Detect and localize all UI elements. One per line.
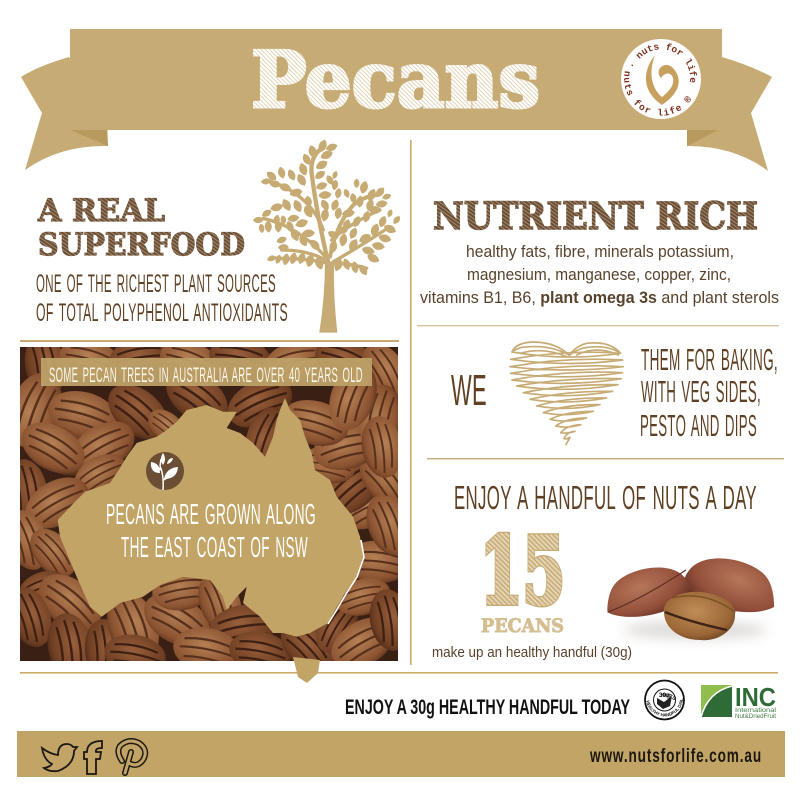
panel: handful <box>432 479 785 661</box>
panel: superfood <box>36 138 402 333</box>
number: 15: 15 <box>480 517 565 625</box>
panel: superfood: OF TOTAL POLYPHENOL ANTIOXIDANTS <box>36 299 288 327</box>
icon: twitter <box>42 744 77 771</box>
icon: healthy handful seal: NUTS <box>661 693 676 700</box>
panel: superfood: ONE OF THE RICHEST PLANT SOURCES <box>36 270 276 298</box>
panel: pecan photo map: PECANS ARE GROWN ALONG <box>106 499 316 531</box>
icon: healthy handful seal: HEALTHY HANDFUL DAILY <box>646 698 683 716</box>
logo: INC: Nut&DriedFruit <box>735 714 776 720</box>
heading: a real superfood: SUPERFOOD <box>38 227 245 263</box>
love text <box>640 342 778 443</box>
heading: nutrient rich: NUTRIENT RICH <box>433 194 758 238</box>
nutrient list: magnesium, manganese, copper, zinc, <box>467 266 731 284</box>
photo: pecan pile <box>20 347 398 661</box>
nutrient list <box>420 243 779 307</box>
tagline: ENJOY A 30g HEALTHY HANDFUL TODAY <box>345 696 630 719</box>
nutrient list: vitamins B1, B6, plant omega 3s and plant sterols <box>420 289 779 307</box>
icon: healthy handful seal: 30g <box>659 692 670 699</box>
superfood description <box>36 270 288 327</box>
panel: we love: WE <box>451 366 487 415</box>
label: pecans: PECANS <box>481 615 564 637</box>
nuts for life logo: · nuts for life <box>631 44 698 82</box>
panel: pecan photo map <box>20 347 398 661</box>
map: australia <box>58 398 364 637</box>
footer band <box>17 731 785 777</box>
ribbon banner <box>21 29 772 171</box>
heading: a real superfood <box>37 193 245 263</box>
panel: pecan photo map: THE EAST COAST OF NSW <box>121 532 308 564</box>
number: 15 <box>480 517 565 625</box>
photo: three pecans <box>598 545 785 640</box>
logo: INC: International <box>735 707 777 714</box>
nuts for life logo: nuts for life ® <box>624 71 691 116</box>
center divider <box>410 140 412 665</box>
panel: pecan photo map: SOME PECAN TREES IN AUSTRALIA ARE OVER 40 YEARS OLD <box>49 364 363 387</box>
map: tasmania <box>293 657 320 683</box>
map caption <box>106 499 316 564</box>
icon: pinterest <box>118 741 145 773</box>
handful caption: make up an healthy handful (30g) <box>432 644 632 661</box>
number: 15: 15 <box>480 517 565 625</box>
logo: INC: INC <box>735 682 776 712</box>
icon: tree <box>253 138 402 333</box>
logo: INC <box>701 682 777 720</box>
panel: nutrient rich <box>420 194 779 307</box>
icon: scribble heart <box>510 342 623 445</box>
panel: we love <box>451 342 778 445</box>
heading: a real superfood: A REAL <box>37 193 165 229</box>
nuts for life logo <box>621 39 701 119</box>
icon: plant badge <box>146 452 184 490</box>
title: Pecans <box>251 35 540 126</box>
nutrient list: healthy fats, fibre, minerals potassium, <box>466 243 734 261</box>
icon: healthy handful seal <box>644 680 685 720</box>
icon: facebook <box>84 741 102 774</box>
callout: tree age <box>41 358 372 387</box>
